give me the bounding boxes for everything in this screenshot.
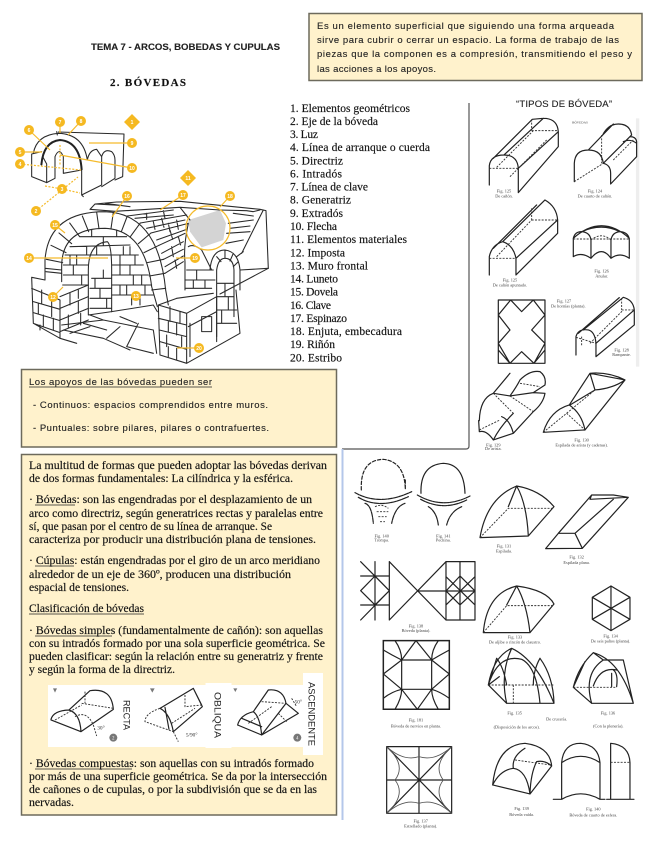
panel: supports: - Puntuales: sobre pilares, pilares o contrafuertes. [33,423,269,434]
heading: tipos de bóveda: “TIPOS DE BÓVEDA” [516,99,612,110]
panel: forms of vaults: · Bóvedas: son las engendradas por el desplazamiento de un [29,494,312,506]
figure 139: sail vault: Bóveda vaída. [509,812,534,817]
figure 140b: quarter-sphere vault [553,743,634,818]
figure 138: rib plan: Fig. 138 [409,623,423,628]
figure 129: groin vault: Fig. 129 [486,443,501,448]
figure 140b: quarter-sphere vault: Fig. 140 [586,807,601,812]
labels: yellow markers on vault drawings: 8 [80,119,83,125]
figure 128: ramped barrel: Fig. 128 [614,347,629,352]
panel: definition [309,14,642,80]
figure 128: ramped barrel [576,297,634,357]
figure 140: squinch: Trompa. [374,538,389,543]
list: vault elements: 1. Elementos geométricos [290,103,411,115]
panel: forms of vaults: caracteriza por producir una distribución plana de tensiones. [29,534,316,546]
labels: yellow markers on vault drawings: 18 [227,194,233,200]
figure 129: groin vault [479,371,545,451]
list: vault elements: 10. Flecha [290,221,337,233]
icon: ascending barrel [233,688,302,742]
list: vault elements: 8. Generatriz [290,194,351,206]
chart: simple vault classification strip: OBLIQUA [212,692,222,739]
figure 124: intersecting barrel: De cuarto de cañón. [578,193,612,198]
figure 135: ribbed vault: Fig. 135 [507,710,522,715]
list: vault elements: 20. Estribo [290,352,342,364]
icon: ascending barrel: 50° [295,698,302,705]
figure 136: annular vault: Anular. [595,273,608,278]
figure 134: six-sided plan: Fig. 134 [603,633,619,638]
icon: ascending barrel: 4 [296,736,299,741]
panel: forms of vaults: arco como directriz, según generatrices rectas y paralelas entre [29,508,323,520]
panel: forms of vaults: pueden clasificar: según la relación entre su generatriz y frente [29,651,323,663]
figure 138: rib plan [361,562,475,633]
labels: yellow markers on vault drawings: 2 [35,209,38,215]
figure 134: six-sided plan: De seis paños (planta). [591,639,630,644]
chart: vault type drawings, lower group [355,459,634,828]
figure 137: plan: Fig. 127 [557,299,572,304]
figure 128: ramped barrel: Rampante. [612,352,631,357]
figure 137: plan [498,299,586,363]
panel: forms of vaults: con su intradós formado por una sola superficie geométrica. Se [29,638,325,650]
list: vault elements: 11. Elementos materiales [290,234,408,246]
figure 136: ribbed vault with tiercerons [573,653,633,728]
labels: yellow markers on vault drawings: 20 [196,346,202,352]
icon: oblique barrel [145,688,202,742]
icon: oblique barrel: 5/90° [186,732,197,739]
panel: definition: piezas que la componen es a compresión, transmitiendo el peso y [317,49,632,60]
figure 132: flat hipped vault [546,495,628,565]
panel: supports [22,370,336,447]
figure 181: square plan: Fig. 181 [409,718,423,723]
panel: forms of vaults: sí, que pasan por el centro de su línea de arranque. Se [29,521,272,533]
list: vault elements: 7. Línea de clave [290,182,368,194]
figure 136: ribbed vault with tiercerons: Fig. 136 [601,710,616,715]
labels: yellow markers on vault drawings: 6 [28,128,31,134]
panel: forms of vaults: espacial de tensiones. [29,582,129,594]
list: vault elements [290,103,430,364]
labels: yellow markers on vault drawings: 14 [26,256,32,262]
list: vault elements: 5. Directriz [290,156,343,168]
panel: forms of vaults: de dos formas fundamentales: La cilíndrica y la esférica. [29,473,293,485]
figure 133: cloister vault [483,586,554,644]
figure 125: barrel vault: De cañón. [495,193,513,198]
chart: simple vault classification strip [48,673,323,755]
panel: definition: Es un elemento superficial que siguiendo una forma arqueada [317,21,615,32]
figure 141: pendentive: Pechina. [436,538,451,543]
panel: forms of vaults: La multitud de formas que pueden adoptar las bóvedas derivan [29,460,327,472]
figure 135: ribbed vault: (Disposición de los arcos). [494,724,540,729]
labels: yellow markers on vault drawings: 19 [192,256,198,262]
labels: yellow markers on vault drawings: 5 [19,150,22,156]
list: vault elements: 15. Dovela [290,286,338,298]
list: vault elements: 3. Luz [290,129,318,141]
panel: definition: sirve para cubrir o cerrar un espacio. La forma de trabajo de las [317,35,619,46]
list: vault elements: 19. Riñón [290,339,335,351]
figure 132: flat hipped vault: Espilada plana. [563,560,590,565]
figure 137: star plan [387,747,452,828]
panel: forms of vaults: · Bóvedas simples (fundamentalmente de cañón): son aquellas [29,625,324,637]
labels: yellow markers on vault drawings: 11 [185,176,191,182]
panel: supports: - Continuos: espacios comprendidos entre muros. [33,400,268,411]
chart: simple vault classification strip: ASCENDENTE [306,682,316,746]
figure 130: hipped groin vault: Espilada de arista (y cadenas). [555,443,608,448]
list: vault elements: 16. Clave [290,300,331,312]
figure 139: sail vault: Fig. 139 [514,806,529,811]
figure 135: ribbed vault [488,648,567,729]
chart: vault type drawings, upper group [479,118,639,451]
icon: straight barrel [51,688,117,742]
figure 181: square plan [383,641,449,728]
figure 133: cloister vault: Fig. 133 [508,634,522,639]
list: vault elements: 6. Intradós [290,168,343,180]
figure 135: pointed barrel: De cañón apuntado. [493,282,527,287]
figure 124: intersecting barrel: Fig. 124 [588,189,603,194]
list: vault elements: 12. Imposta [290,248,345,260]
labels: yellow markers on vault drawings: 10 [129,166,135,172]
figure 134: six-sided plan [591,586,630,644]
labels: yellow markers on vault drawings: 15 [52,223,58,229]
labels: yellow markers on vault drawings: 16 [124,194,130,200]
figure 130: hipped groin vault [543,373,625,448]
panel: forms of vaults: por más de una superficie geométrica. Se da por la intersección [29,771,327,783]
list: vault elements: 4. Línea de arranque o cuerda [290,142,430,154]
figure 136: annular vault [573,226,629,278]
figure 141: pendentive: Fig. 141 [436,533,451,538]
list: vault elements: 14. Luneto [290,274,338,286]
panel: forms of vaults: Clasificación de bóvedas [29,603,145,615]
list: vault elements: 17. Espinazo [290,313,347,325]
figure 137: star plan: Fig. 137 [413,818,429,823]
chart: simple vault classification strip: RECTA [120,700,132,731]
figure 141: pendentive [417,463,470,543]
list: vault elements: 18. Enjuta, embecadura [290,326,402,338]
figure 131: hipped vault: Espilada. [496,549,512,554]
labels: yellow markers on vault drawings: 1 [131,120,134,126]
labels: yellow markers on vault drawings: 13 [133,294,139,300]
figure 133: cloister vault: De aljibe o rincón de claustro. [489,639,541,644]
labels: yellow markers on vault drawings: 4 [19,162,22,168]
list: vault elements: 9. Extradós [290,208,344,220]
figure 131: hipped vault: Fig. 131 [497,544,511,549]
panel: forms of vaults: nervadas. [29,797,74,809]
figure 130: hipped groin vault: Fig. 130 [574,438,589,443]
labels: yellow markers on vault drawings [15,114,235,353]
figure 132: flat hipped vault: Fig. 132 [569,554,584,559]
list: vault elements: 2. Eje de la bóveda [290,116,378,128]
figure 125: barrel vault [489,118,558,198]
figure 139: sail vault [493,743,552,817]
figure 124: intersecting barrel [574,124,637,198]
panel: forms of vaults: alrededor de un eje de 360º, producen una distribución [29,569,291,581]
figure 135: pointed barrel: Fig. 125 [503,278,517,283]
panel: definition: las acciones a los apoyos. [317,64,436,75]
labels: yellow markers on vault drawings: 3 [61,187,64,193]
chart: vault type drawings, upper group: BÓVEDAS [572,119,588,124]
illustration: small vault with geometric elements [32,132,124,197]
figure 135: ribbed vault: De crucería. [546,717,567,722]
figure 137: plan: De hornías (planta). [551,303,586,308]
figure 140: squinch: Fig. 140 [374,533,389,538]
labels: yellow markers on vault drawings: 9 [131,141,134,147]
labels: yellow markers on vault drawings: 7 [59,120,62,126]
labels: yellow markers on vault drawings: 12 [50,295,56,301]
panel: forms of vaults: · Bóvedas compuestas: son aquellas con su intradós formado [29,758,314,770]
panel: supports: Los apoyos de las bóvedas pueden ser [29,377,212,388]
frame lines: separator around vault types [342,103,469,820]
panel: forms of vaults [22,454,336,815]
title: TEMA 7 - ARCOS, BOBEDAS Y CUPULAS [91,42,280,53]
list: vault elements: 13. Muro frontal [290,260,368,272]
figure 136: annular vault: Fig. 126 [594,269,610,274]
figure 131: hipped vault [480,486,554,554]
figure 140b: quarter-sphere vault: Bóveda de cuarto de esfera. [569,813,617,818]
figure 129: groin vault: De arista. [485,446,502,451]
figure 181: square plan: Bóveda de nervios en planta. [391,723,441,728]
labels: yellow markers on vault drawings: 17 [180,193,186,199]
figure 140: squinch [355,459,412,543]
icon: straight barrel: 30° [97,724,105,731]
figure 125: barrel vault: Fig. 125 [497,189,511,194]
panel: forms of vaults: · Cúpulas: están engendradas por el giro de un arco meridiano [29,555,320,567]
figure 136: ribbed vault with tiercerons: (Con la plenería). [593,723,624,728]
illustration: masonry barrel vault [32,201,268,363]
figure 135: pointed barrel [489,200,558,287]
panel: forms of vaults: y según la forma de la directriz. [29,664,175,676]
heading: bóvedas: 2. BÓVEDAS [110,77,186,89]
figure 138: rib plan: Bóveda (planta). [402,628,430,633]
panel: forms of vaults: de cañones o de cupulas, o por la subdivisión que se da en las [29,784,318,796]
icon: straight barrel: 2 [112,736,115,741]
figure 137: star plan: Estrellado (planta). [404,823,437,828]
